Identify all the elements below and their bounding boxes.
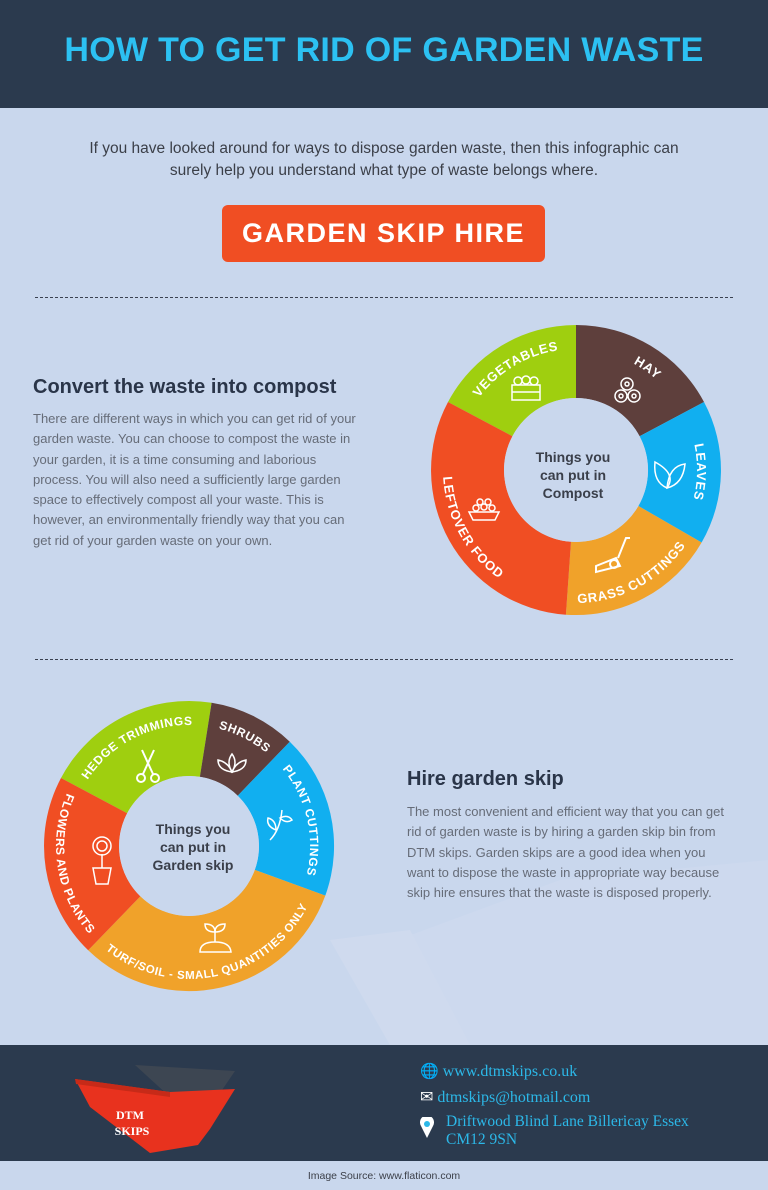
segment: plant cuttings: PLANT CUTTINGS (282, 764, 318, 876)
segment: vegetables (448, 325, 576, 436)
text: hire garden skip (407, 804, 724, 900)
segment: hay: HAY (634, 356, 662, 378)
segment: shrubs: SHRUBS (219, 721, 270, 752)
text: compost: get rid of your garden waste on your own. (33, 533, 272, 548)
donut center: garden skip: Things you (156, 821, 230, 837)
intro text (89, 140, 679, 179)
contact: address (420, 1113, 689, 1148)
donut center: compost: Things you (536, 449, 610, 465)
text: compost (33, 411, 356, 548)
segment: turf/soil (88, 870, 326, 992)
segment: hay (576, 325, 704, 436)
contact: email: ✉ dtmskips@hotmail.com (420, 1089, 590, 1106)
contact: address: Driftwood Blind Lane Billericay Essex (446, 1113, 689, 1130)
button: garden skip hire: GARDEN SKIP HIRE (242, 218, 525, 248)
segment: leftover food: LEFTOVER FOOD (443, 476, 502, 577)
heading: hire garden skip: Hire garden skip (407, 768, 564, 790)
segment: hedge trimmings (61, 701, 212, 814)
text: hire garden skip: DTM skips. Garden skips are a good idea when you (407, 845, 705, 860)
text: compost: garden waste. You can choose to compost the waste in (33, 431, 350, 446)
segment: vegetables: VEGETABLES (472, 342, 557, 396)
header (0, 0, 768, 108)
segment: flowers and plants: FLOWERS AND PLANTS (56, 794, 94, 933)
image source: Image Source: www.flaticon.com (308, 1170, 460, 1182)
background watermark skip (330, 820, 768, 1045)
button: garden skip hire (222, 205, 545, 262)
segment: grass cuttings: GRASS CUTTINGS (578, 542, 684, 603)
segment: plant cuttings (238, 742, 334, 896)
heading: compost: Convert the waste into compost (33, 376, 336, 398)
intro text: surely help you understand what type of waste belongs where. (170, 162, 598, 179)
text: compost: process. You will also need a sufficiently large garden (33, 472, 341, 487)
text: hire garden skip: rid of garden waste is by hiring a garden skip bin from (407, 824, 716, 839)
contact: address: CM12 9SN (446, 1131, 517, 1148)
skip image: SKIPS (115, 1124, 150, 1138)
segment: leaves (638, 402, 721, 542)
text: hire garden skip: The most convenient and efficient way that you can get (407, 804, 724, 819)
segment: leftover food (431, 402, 571, 615)
skip image (75, 1065, 235, 1153)
segment: turf/soil: TURF/SOIL - SMALL QUANTITIES ONLY (108, 902, 306, 979)
text: compost: however, an environmentally friendly way that you can (33, 512, 344, 527)
text: compost: space to effectively compost all your waste. This is (33, 492, 324, 507)
skip image: DTM (116, 1108, 144, 1122)
segment: shrubs (200, 702, 290, 796)
donut center: garden skip: Garden skip (153, 857, 233, 873)
text: hire garden skip: skip hire ensures that the waste is disposed properly. (407, 885, 712, 900)
donut center: compost: can put in (540, 467, 606, 483)
text: hire garden skip: want to dispose the waste in appropriate way because (407, 865, 719, 880)
contact: website: 🌐 www.dtmskips.co.uk (420, 1063, 577, 1080)
segment: grass cuttings (566, 506, 702, 615)
text: compost: your garden, it is a time consuming and laborious (33, 452, 316, 467)
donut center: compost (504, 398, 648, 542)
donut center: garden skip (119, 776, 259, 916)
intro text: If you have looked around for ways to dispose garden waste, then this infographic can (89, 140, 679, 157)
text: compost: There are different ways in which you can get rid of your (33, 411, 356, 426)
title: HOW TO GET RID OF GARDEN WASTE (64, 31, 704, 69)
footer (0, 1045, 768, 1161)
segment: hedge trimmings: HEDGE TRIMMINGS (81, 716, 192, 780)
segment: flowers and plants (44, 778, 140, 950)
donut center: garden skip: can put in (160, 839, 226, 855)
donut center: compost: Compost (543, 485, 604, 501)
segment: leaves: LEAVES (694, 444, 706, 500)
